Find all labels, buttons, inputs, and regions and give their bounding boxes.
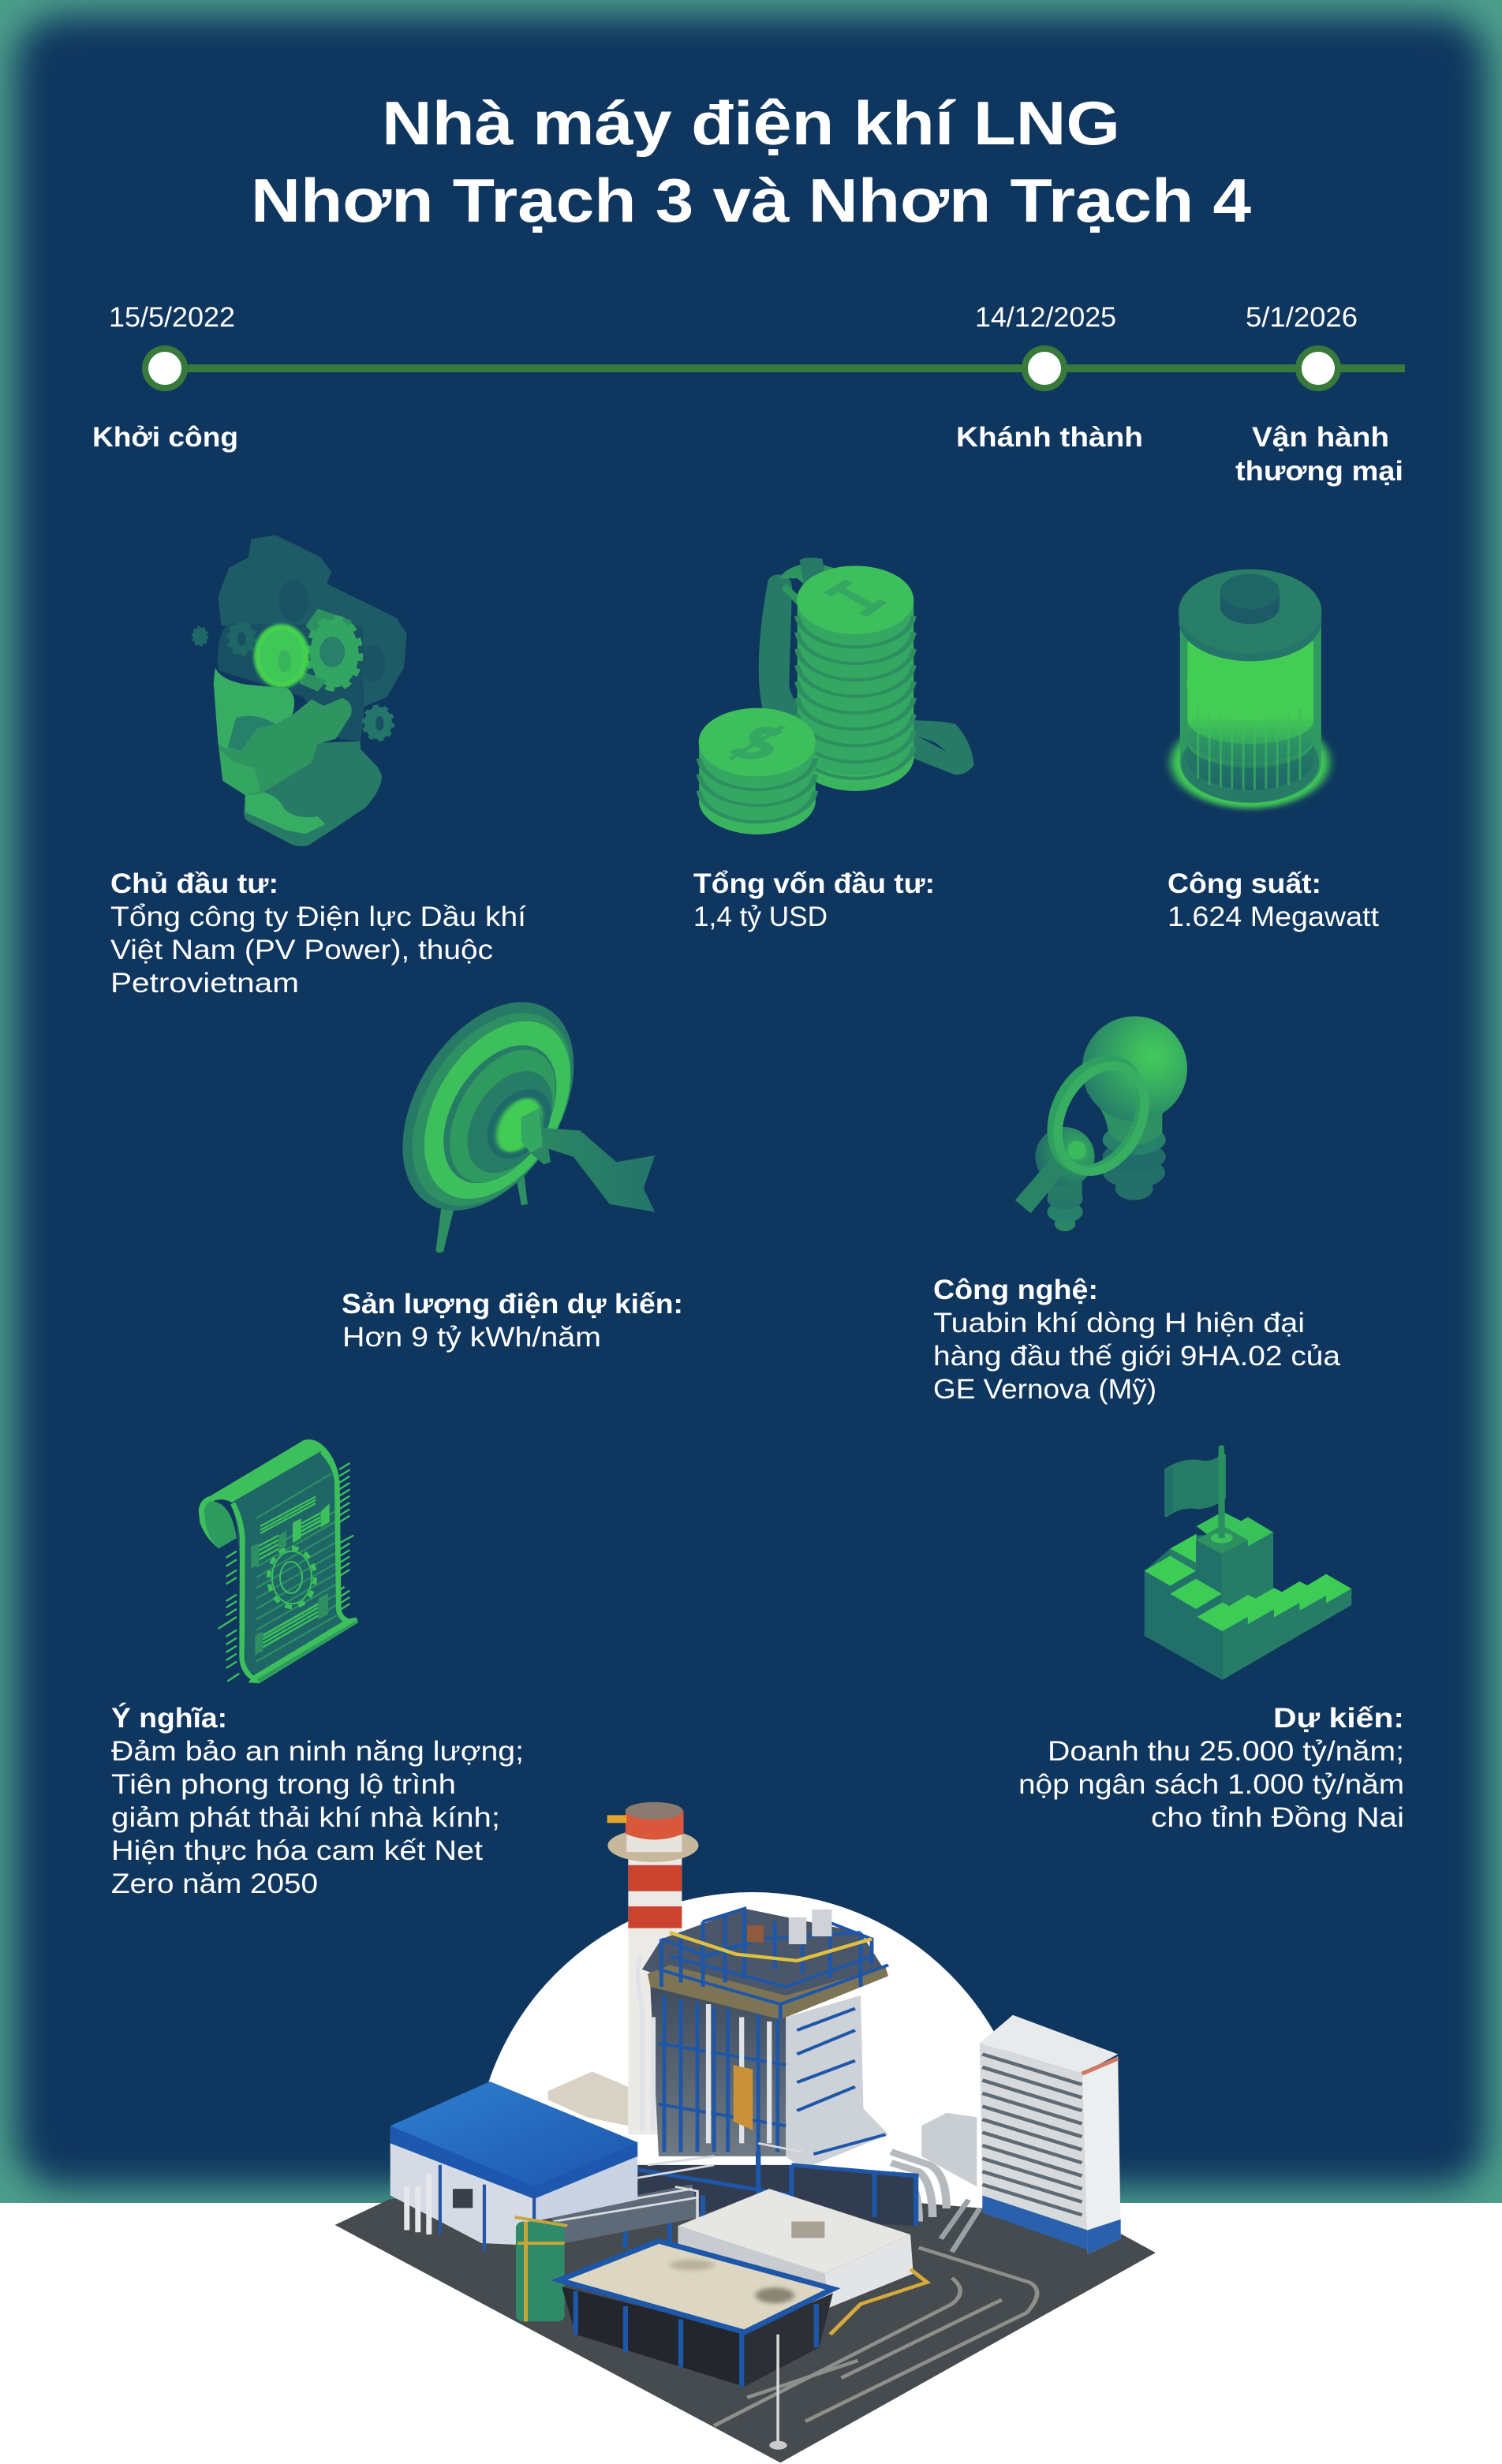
right building (980, 2015, 1121, 2254)
text block: forecast: Doanh thu 25.000 tỷ/năm; (1048, 1736, 1404, 1767)
text block: total investment: 1,4 tỷ USD (693, 902, 828, 932)
timeline milestone: 5/1/2026: Vận hành (1252, 422, 1389, 453)
text block: significance: Tiên phong trong lộ trình (111, 1769, 456, 1800)
timeline milestone: 14/12/2025: 14/12/2025 (975, 302, 1116, 333)
timeline milestone: 15/5/2022: 15/5/2022 (109, 302, 235, 333)
staircases and light pole (769, 2200, 980, 2450)
text block: significance: Hiện thực hóa cam kết Net (111, 1835, 483, 1866)
icon: battery (1171, 569, 1329, 808)
white central block (678, 2189, 914, 2309)
text block: total investment: Tổng vốn đầu tư: (693, 868, 935, 899)
text block: investor (110, 868, 526, 999)
icon: blueprint scroll (199, 1439, 358, 1683)
text block: significance: Ý nghĩa: (111, 1702, 227, 1734)
gray pipes (891, 2152, 947, 2222)
text block: technology: Công nghệ: (933, 1275, 1098, 1305)
machine block behind pipes (921, 2113, 977, 2186)
white semicircle backdrop (474, 1892, 1031, 2449)
icon: stairs with flag (1145, 1445, 1351, 1680)
tower top deck (642, 1909, 888, 2019)
text block: investor: Chủ đầu tư: (110, 868, 278, 899)
timeline (92, 302, 1405, 487)
text block: investor: Việt Nam (PV Power), thuộc (110, 935, 493, 965)
text block: technology (933, 1275, 1341, 1405)
chimney stack (607, 1802, 698, 2134)
blue pipe rack (548, 2143, 919, 2248)
text block: capacity: 1.624 Megawatt (1168, 902, 1379, 932)
icon: coin stacks (699, 558, 974, 834)
text block: expected output: Sản lượng điện dự kiến: (342, 1289, 683, 1320)
icon: target with arrow (372, 992, 655, 1253)
timeline milestone: 5/1/2026: 5/1/2026 (1246, 302, 1358, 333)
text block: significance: giảm phát thải khí nhà kính; (111, 1802, 500, 1833)
timeline milestone: 15/5/2022: Khởi công (92, 422, 238, 453)
text block: expected output: Hơn 9 tỷ kWh/năm (342, 1322, 601, 1353)
text block: capacity (1168, 868, 1379, 932)
green tank (515, 2217, 567, 2321)
ground plate (335, 2199, 1156, 2462)
icon: head with gears (192, 535, 407, 846)
timeline milestone: 14/12/2025 (956, 302, 1143, 453)
cooling units behind (548, 2071, 628, 2126)
power plant illustration (335, 1802, 1156, 2462)
text block: significance (111, 1702, 524, 1899)
title: Nhà máy điện khí LNG (382, 88, 1120, 158)
text block: technology: GE Vernova (Mỹ) (933, 1374, 1156, 1405)
timeline milestone: 5/1/2026: thương mại (1235, 456, 1403, 487)
text block: technology: hàng đầu thế giới 9HA.02 của (933, 1341, 1341, 1372)
timeline milestone: 14/12/2025: Khánh thành (956, 422, 1143, 453)
canopy building (559, 2241, 833, 2387)
text block: significance: Zero năm 2050 (111, 1869, 318, 1899)
text block: investor: Tổng công ty Điện lực Dầu khí (110, 902, 526, 932)
title (251, 88, 1251, 235)
boiler tower (638, 1956, 888, 2169)
text block: investor: Petrovietnam (110, 968, 299, 999)
text block: forecast (1018, 1703, 1404, 1833)
text block: forecast: cho tỉnh Đồng Nai (1151, 1802, 1404, 1833)
text block: forecast: nộp ngân sách 1.000 tỷ/năm (1018, 1769, 1404, 1800)
text block: total investment (693, 868, 935, 932)
text block: capacity: Công suất: (1168, 868, 1321, 899)
text block: forecast: Dự kiến: (1273, 1703, 1404, 1734)
timeline milestone: 5/1/2026 (1235, 302, 1403, 487)
text block: expected output (342, 1289, 683, 1353)
icon: light bulbs with magnifier (1015, 1016, 1187, 1231)
title: Nhơn Trạch 3 và Nhơn Trạch 4 (251, 166, 1251, 235)
timeline milestone: 15/5/2022 (92, 302, 238, 453)
text block: technology: Tuabin khí dòng H hiện đại (933, 1308, 1305, 1338)
blue roofed building (390, 2081, 637, 2252)
text block: significance: Đảm bảo an ninh năng lượng; (111, 1736, 524, 1767)
